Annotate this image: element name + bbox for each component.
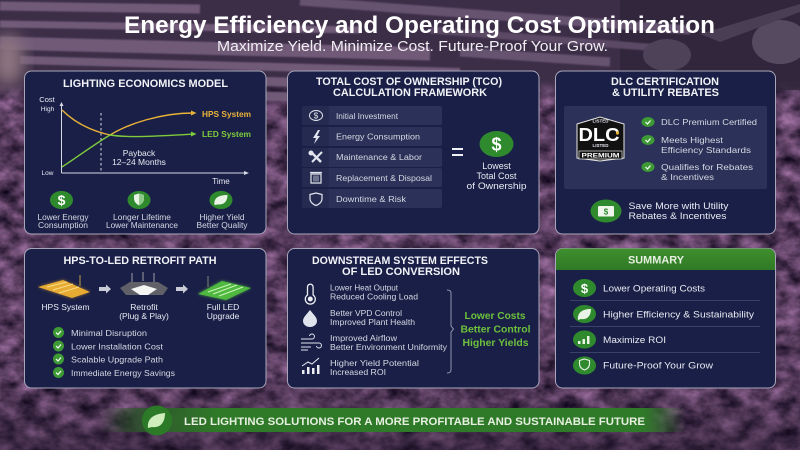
effect: VPD: Better VPD Control [330,308,402,318]
line chart: cost over time [39,95,251,186]
row: replacement and disposal [302,168,442,187]
item: maximize ROI: Maximize ROI [603,335,666,345]
icon: lower energy consumption: $ [58,192,66,208]
icon: LED fixture: Upgrade [207,311,240,321]
row: downtime and risk: Downtime & Risk [336,194,407,204]
result: lowest total cost of ownership: Total Cost [476,171,517,181]
subtitle: Maximize Yield. Minimize Cost. Future-Proof Your Grow. [217,38,608,55]
icon: longer lifetime: Longer Lifetime [113,212,171,222]
badge: DLC premium: LISTED [592,118,609,124]
effect: airflow [301,333,448,352]
panel: total cost of ownership: CALCULATION FRAMEWORK [333,87,487,99]
effect: airflow: Improved Airflow [330,333,398,343]
panel: downstream effects [288,248,539,388]
item: higher efficiency: Higher Efficiency & Sustainability [603,310,755,320]
icon: longer lifetime [106,191,178,230]
line chart: cost over time: High [41,106,55,113]
check list: retrofit benefits: Immediate Energy Savings [71,368,175,378]
row: initial investment: Initial Investment [336,111,399,121]
row: downtime and risk [302,189,442,208]
banner: LED LIGHTING SOLUTIONS FOR A MORE PROFITABLE AND SUSTAINABLE FUTURE [184,416,645,428]
icon: LED fixture: Full LED [207,302,239,312]
panel: total cost of ownership [288,71,539,234]
effect: heat: Reduced Cooling Load [330,292,418,302]
line chart: cost over time: Time [212,177,230,186]
icon: leaf [142,406,172,436]
result: lowest total cost of ownership: of Ownership [466,181,526,191]
callout: utility rebates [590,200,729,222]
check list: DLC benefits: Qualifies for Rebates [661,162,753,172]
panel: lighting economics model [24,71,266,234]
icon: longer lifetime: Lower Maintenance [106,220,178,230]
item: future-proof [573,356,714,374]
icon: retrofit fixture [119,272,169,321]
line chart: cost over time: LED System [202,129,251,139]
item: lower operating costs: $ [581,281,589,296]
arrow: retrofit to LED [176,284,188,294]
heading: downstream: DOWNSTREAM SYSTEM EFFECTS [312,255,488,267]
row: maintenance and labor: Maintenance & Labor [336,152,422,162]
panel: DLC certification: & UTILITY REBATES [612,87,719,99]
badge: DLC premium: LISTED [592,143,609,148]
check list: retrofit benefits: Scalable Upgrade Path [71,354,163,364]
item: higher efficiency [573,305,755,323]
panel: retrofit path [24,248,266,388]
badge: DLC premium: PREMIUM [582,153,620,160]
heading: lighting economics: LIGHTING ECONOMICS MODEL [63,78,228,90]
check list: DLC benefits: & Incentives [661,172,714,182]
check list: retrofit benefits: Lower Installation Cost [71,342,164,352]
line chart: cost over time: Cost [39,95,56,104]
result: lowest total cost of ownership: $ [491,134,502,154]
badge: DLC premium: DLC [578,125,620,145]
line chart: cost over time: Payback [123,148,156,158]
row: energy consumption [302,127,442,146]
row: initial investment [302,106,442,125]
heading: retrofit: HPS-TO-LED RETROFIT PATH [64,255,217,267]
icon: HPS fixture [38,275,90,312]
effect: heat [305,282,418,304]
icon: retrofit fixture: Retrofit [130,302,158,312]
item: maximize ROI [573,330,666,348]
equals sign [452,149,463,155]
icon: higher yield [196,191,248,230]
icon: LED fixture [198,276,251,321]
result: lowest total cost of ownership: Lowest [482,161,511,171]
callout: utility rebates: Save More with Utility [628,201,729,211]
panel: summary [556,248,776,388]
line chart: cost over time: HPS System [202,109,251,119]
effect: VPD: Improved Plant Health [330,317,415,327]
line chart: cost over time: 12–24 Months [112,157,166,167]
row: energy consumption: Energy Consumption [336,132,420,142]
heading: TCO: TOTAL COST OF OWNERSHIP (TCO) [316,76,502,88]
check list: retrofit benefits [53,327,175,378]
icon: higher yield: Better Quality [196,220,248,230]
check list: DLC benefits [642,117,757,182]
badge: DLC premium [577,117,624,161]
effect: yield [302,358,419,377]
row: replacement and disposal: Replacement & Disposal [336,173,432,183]
icon: HPS fixture: HPS System [41,302,90,312]
callout: utility rebates: $ [604,208,609,216]
row: maintenance and labor [302,148,442,167]
outcomes: Higher Yields [462,337,529,349]
outcomes [460,310,531,349]
callout: utility rebates: Rebates & Incentives [628,211,727,221]
icon: lower energy consumption: Consumption [38,220,88,230]
heading: DLC: DLC CERTIFICATION [611,76,719,88]
banner [100,406,685,436]
outcomes: Lower Costs [464,310,526,322]
brace [447,290,454,373]
effect: heat: Lower Heat Output [330,282,399,292]
effect: VPD [303,308,415,327]
icon: retrofit fixture: (Plug & Play) [119,311,169,321]
title: Energy Efficiency and Operating Cost Optimization [124,12,715,39]
check list: DLC benefits: DLC Premium Certified [661,117,757,127]
check list: retrofit benefits: Minimal Disruption [71,328,147,338]
icon: lower energy consumption: Lower Energy [38,212,89,222]
effect: airflow: Better Environment Uniformity [330,342,448,352]
effect: yield: Increased ROI [330,367,386,377]
item: lower operating costs [573,279,706,297]
panel: DLC certification [556,71,776,234]
result: lowest total cost of ownership [466,131,526,191]
summary header [556,248,775,270]
row: initial investment: $ [314,112,319,120]
arrow: HPS to retrofit [99,284,111,294]
line chart: cost over time: Low [42,170,54,177]
item: future-proof: Future-Proof Your Grow [603,360,714,370]
outcomes: Better Control [460,324,531,336]
summary header: SUMMARY [628,254,685,266]
item: lower operating costs: Lower Operating Costs [603,284,706,294]
panel: downstream effects: OF LED CONVERSION [342,266,460,278]
effect: yield: Higher Yield Potential [330,358,419,368]
check list: DLC benefits: Meets Highest [661,135,724,145]
icon: lower energy consumption [38,191,89,230]
icon: higher yield: Higher Yield [200,212,245,222]
check list: DLC benefits: Efficiency Standards [661,145,751,155]
